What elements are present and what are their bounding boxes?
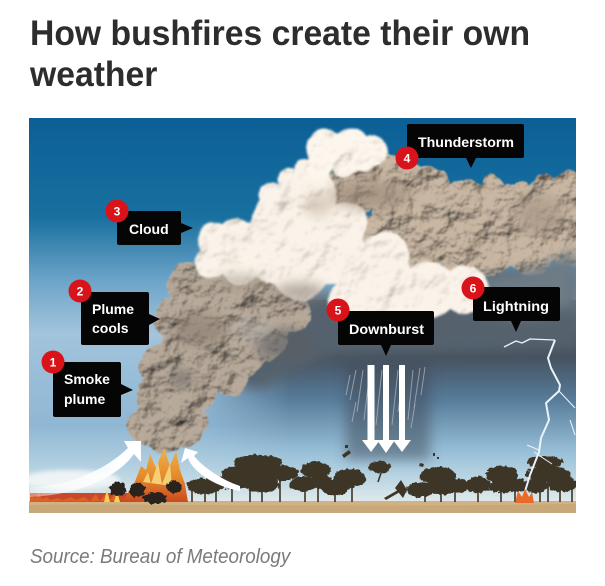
label 5: downburst xyxy=(326,298,434,356)
smoke plume column xyxy=(126,250,312,454)
title: How bushfires create their own xyxy=(30,14,530,53)
label 2: plume cools: cools xyxy=(92,320,129,336)
lightning strike fire xyxy=(515,489,534,503)
rain streaks xyxy=(346,367,425,428)
tan upper cloud band xyxy=(328,153,576,278)
right arrow xyxy=(181,448,240,491)
tree trunks xyxy=(192,470,572,502)
horizon haze xyxy=(20,470,120,490)
label 4: thunderstorm: Thunderstorm xyxy=(418,134,514,150)
label 4: thunderstorm xyxy=(396,124,524,170)
illustration: bushfire weather diagram xyxy=(29,118,576,513)
flying debris xyxy=(342,445,439,500)
main white cloud xyxy=(195,158,489,330)
label 3: cloud: 3 xyxy=(114,204,121,218)
tree canopies xyxy=(187,455,577,497)
label 6: lightning xyxy=(462,276,560,332)
low fire strip xyxy=(30,490,130,502)
left arrow xyxy=(30,441,141,497)
label 1: smoke plume xyxy=(42,350,133,417)
source credit: Source: Bureau of Meteorology xyxy=(30,546,290,568)
label 4: thunderstorm: 4 xyxy=(404,152,411,166)
sky background xyxy=(29,118,576,513)
cloud top cap xyxy=(306,127,387,178)
cloud mass xyxy=(126,127,600,454)
label 3: cloud: Cloud xyxy=(129,221,169,237)
cloud shading xyxy=(172,181,564,384)
intake arrows xyxy=(30,441,240,497)
label 5: downburst: Downburst xyxy=(349,321,424,337)
dark storm base xyxy=(206,300,576,464)
burning tree silhouettes xyxy=(110,481,182,504)
title: weather xyxy=(30,55,157,94)
label 5: downburst: 5 xyxy=(335,304,342,318)
label 3: cloud xyxy=(106,200,193,245)
label 6: lightning: Lightning xyxy=(483,298,549,314)
ground xyxy=(29,501,576,513)
label 2: plume cools xyxy=(68,280,160,345)
title xyxy=(30,14,530,94)
fire xyxy=(110,448,188,504)
trees xyxy=(187,455,577,502)
smoke shadow xyxy=(220,270,576,390)
label 6: lightning: 6 xyxy=(470,282,477,296)
downburst rain column xyxy=(346,362,430,460)
label 2: plume cools: 2 xyxy=(77,284,84,298)
downburst arrows xyxy=(362,365,411,453)
storm cloud rear xyxy=(480,250,576,318)
label 1: smoke plume: plume xyxy=(64,391,105,407)
label 2: plume cools: Plume xyxy=(92,301,134,317)
lightning bolt xyxy=(504,339,575,498)
label 1: smoke plume: 1 xyxy=(50,356,57,370)
label 1: smoke plume: Smoke xyxy=(64,371,110,387)
